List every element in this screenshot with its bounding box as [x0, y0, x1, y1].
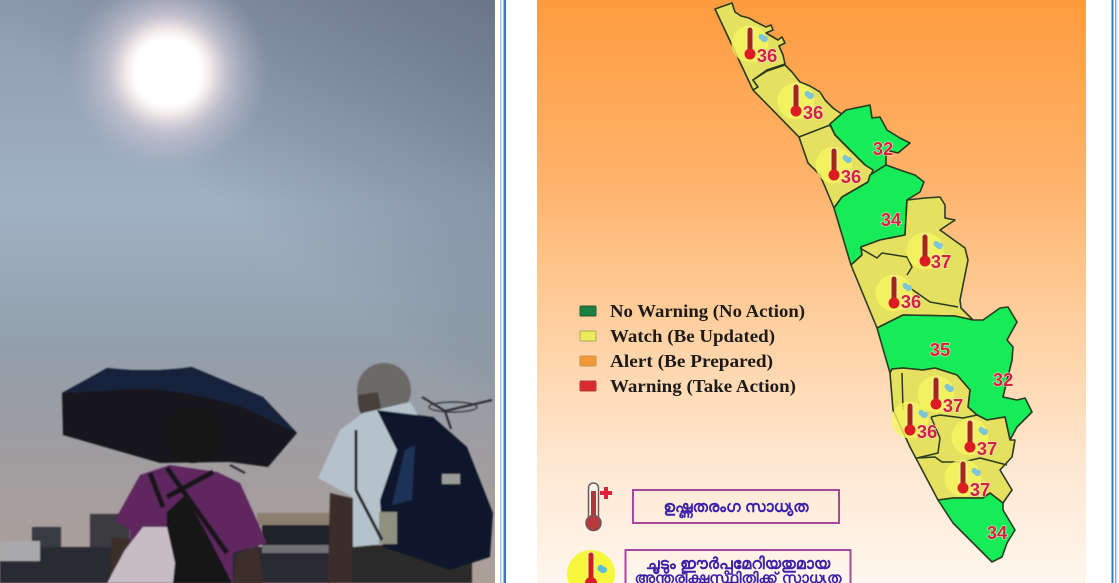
panel: orange forecast background — [537, 0, 1086, 583]
backpack — [165, 495, 232, 583]
icon: humidity thermometer — [567, 550, 615, 583]
swatch: alert — [580, 356, 596, 366]
icon: heatwave thermometer — [586, 483, 612, 530]
temperature marker: 36: 36 — [841, 166, 861, 187]
district: Alappuzha-Kollam — [890, 368, 1015, 503]
callout: humid atmosphere possibility — [626, 550, 850, 583]
temperature marker: 36: 36 — [757, 45, 777, 66]
label: no warning: No Warning (No Action) — [610, 301, 805, 322]
district: Thiruvananthapuram — [938, 493, 1015, 562]
woman with umbrella — [62, 367, 297, 583]
callout: heatwave possibility: ഉഷ്ണതരംഗ സാധ്യത — [664, 499, 809, 520]
label: watch: Watch (Be Updated) — [610, 326, 775, 347]
temperature marker: 37 — [918, 376, 963, 416]
map: Kerala districts — [715, 3, 1032, 562]
photo: sun over pedestrians — [0, 0, 495, 583]
temperature marker: 36 — [892, 402, 937, 442]
temperature marker: 36 — [876, 274, 921, 312]
temperature label: 32 Idukki: 32 — [993, 369, 1013, 390]
callout: humid atmosphere possibility: ചൂടും ഈർപ്പമേറിയതുമായ — [646, 555, 831, 576]
temperature label: 34 Thiruvananthapuram: 34 — [987, 522, 1008, 543]
temperature marker: 36: 36 — [917, 421, 937, 442]
man with backpack — [318, 363, 493, 583]
district: Thrissur-Ernakulam — [851, 197, 973, 328]
swatch: no warning — [580, 306, 596, 316]
callout: heatwave possibility — [633, 490, 839, 523]
sun — [68, 0, 268, 172]
district: Kasaragod-Kannur — [715, 3, 785, 90]
district: Wayanad — [830, 105, 910, 175]
temperature label: 35 Kottayam: 35 — [930, 339, 950, 360]
swatch: warning — [580, 381, 596, 391]
district: Palakkad — [834, 165, 924, 265]
buildings skyline — [0, 397, 492, 583]
temperature marker: 37: 37 — [977, 438, 997, 459]
temperature marker: 37: 37 — [931, 251, 951, 272]
temperature marker: 36 — [778, 82, 823, 123]
temperature marker: 36 — [732, 26, 777, 66]
label: warning: Warning (Take Action) — [610, 376, 796, 397]
temperature marker: 36 — [816, 146, 861, 187]
swatch: watch — [580, 331, 596, 341]
temperature label: 32 Wayanad: 32 — [873, 138, 893, 159]
temperature marker: 37: 37 — [943, 395, 963, 416]
district: Kozhikode — [753, 65, 846, 137]
legend: warning levels — [580, 301, 805, 397]
temperature marker: 37 — [906, 232, 951, 272]
frame: blue rule lines — [495, 0, 1116, 583]
temperature label: 34 Palakkad: 34 — [881, 209, 902, 230]
label: alert: Alert (Be Prepared) — [610, 351, 773, 372]
temperature marker: 37: 37 — [970, 479, 990, 500]
district: Malappuram — [799, 125, 873, 208]
district: Idukki-Kottayam — [877, 307, 1032, 440]
temperature marker: 37 — [944, 460, 990, 500]
temperature marker: 37 — [952, 418, 997, 459]
temperature marker: 36: 36 — [803, 102, 823, 123]
temperature marker: 36: 36 — [901, 291, 921, 312]
